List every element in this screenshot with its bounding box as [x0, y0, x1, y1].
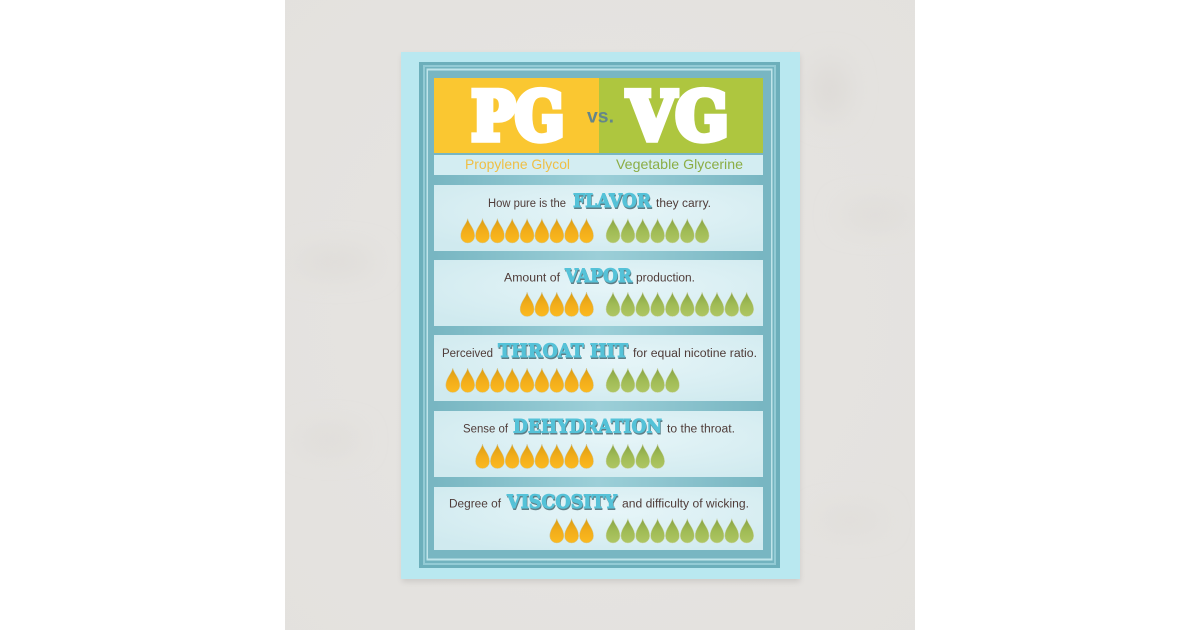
- flavor sentence: they carry.: [656, 198, 711, 210]
- flavor sentence: How pure is the: [488, 198, 566, 210]
- card: [401, 52, 800, 579]
- subtitle strip: [434, 155, 763, 175]
- Propylene Glycol: Propylene Glycol: [465, 156, 570, 172]
- panel: viscosity: [434, 487, 763, 550]
- dehydration sentence: DEHYDRATION: [514, 417, 663, 439]
- VG title: VG: [627, 78, 728, 156]
- VG drops: 5: [606, 368, 679, 392]
- viscosity sentence: [449, 491, 749, 514]
- throat hit sentence: THROAT HIT: [498, 340, 628, 362]
- throat hit sentence: THROAT HIT: [499, 342, 629, 364]
- Vegetable Glycerine: Vegetable Glycerine: [616, 156, 743, 172]
- VG drops: 7: [606, 218, 709, 243]
- vapor sentence: [504, 265, 695, 288]
- PG drops: 10: [446, 368, 594, 392]
- vapor sentence: production.: [636, 272, 695, 284]
- flavor sentence: FLAVOR: [574, 192, 652, 214]
- vapor sentence: VAPOR: [565, 266, 633, 288]
- VG drops: 4: [606, 444, 665, 468]
- PG drops: 3: [550, 518, 594, 543]
- panel: flavor: [434, 185, 763, 251]
- dehydration sentence: to the throat.: [667, 424, 735, 436]
- PG panel: [434, 78, 599, 153]
- dehydration sentence: [463, 416, 735, 439]
- PG drops: 5: [520, 292, 594, 316]
- viscosity sentence: and difficulty of wicking.: [622, 498, 749, 510]
- dehydration sentence: DEHYDRATION: [513, 416, 662, 438]
- throat hit sentence: for equal nicotine ratio.: [633, 348, 757, 360]
- divider bands: [434, 175, 763, 487]
- throat hit sentence: [442, 340, 757, 364]
- VG drops: 10: [606, 518, 754, 543]
- PG drops: 8: [476, 444, 594, 468]
- VG drops: 10: [606, 292, 754, 316]
- panel: vapor: [434, 260, 763, 326]
- paper background: [285, 0, 915, 630]
- throat hit sentence: Perceived: [442, 348, 493, 360]
- panel: throat hit: [434, 335, 763, 401]
- vapor sentence: VAPOR: [564, 265, 632, 287]
- flavor sentence: FLAVOR: [573, 190, 651, 212]
- viscosity sentence: Degree of: [449, 498, 502, 510]
- viscosity sentence: VISCOSITY: [506, 491, 617, 513]
- vs label: vs.: [587, 106, 614, 128]
- flavor sentence: [488, 190, 711, 214]
- panel: dehydration: [434, 411, 763, 477]
- viscosity sentence: VISCOSITY: [507, 492, 618, 514]
- PG drops: 9: [461, 218, 594, 243]
- PG title: PG: [472, 78, 564, 156]
- VG panel: [599, 78, 763, 153]
- vapor sentence: Amount of: [504, 272, 561, 284]
- card shadow: [402, 55, 800, 582]
- header: PG vs. VG: [434, 78, 763, 156]
- dehydration sentence: Sense of: [463, 424, 509, 436]
